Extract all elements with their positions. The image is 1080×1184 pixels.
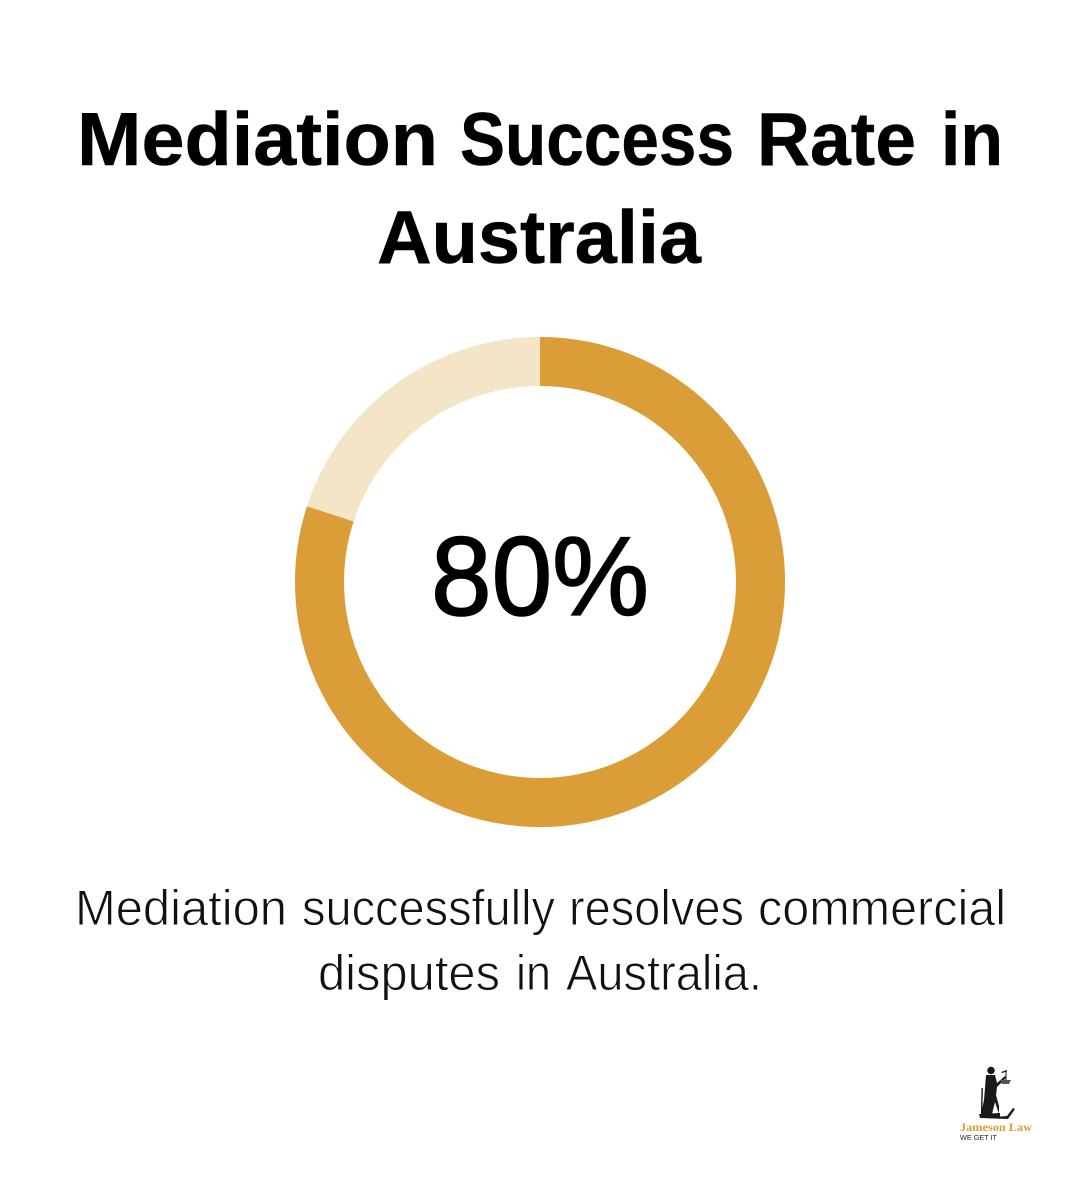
description: disputes — [318, 945, 500, 1001]
center value: 80% — [431, 514, 649, 639]
description: successfully — [302, 880, 555, 936]
description: Mediation — [75, 880, 287, 936]
description: Australia. — [566, 945, 762, 1001]
description — [75, 880, 1006, 1001]
description: in — [516, 945, 551, 1001]
donut chart: 80% — [320, 362, 761, 802]
title: Rate — [757, 97, 916, 181]
logo: Jameson Law — [960, 1067, 1033, 1142]
brand name: Jameson Law — [960, 1122, 1033, 1134]
title: Success — [460, 97, 734, 181]
title: Mediation — [77, 97, 438, 181]
description: commercial — [758, 880, 1006, 936]
tagline: WE GET IT — [960, 1133, 997, 1142]
title — [77, 97, 1003, 279]
title: Australia — [377, 195, 702, 279]
title: in — [941, 97, 1003, 181]
icon: lady justice — [979, 1067, 1015, 1119]
description: resolves — [569, 880, 744, 936]
